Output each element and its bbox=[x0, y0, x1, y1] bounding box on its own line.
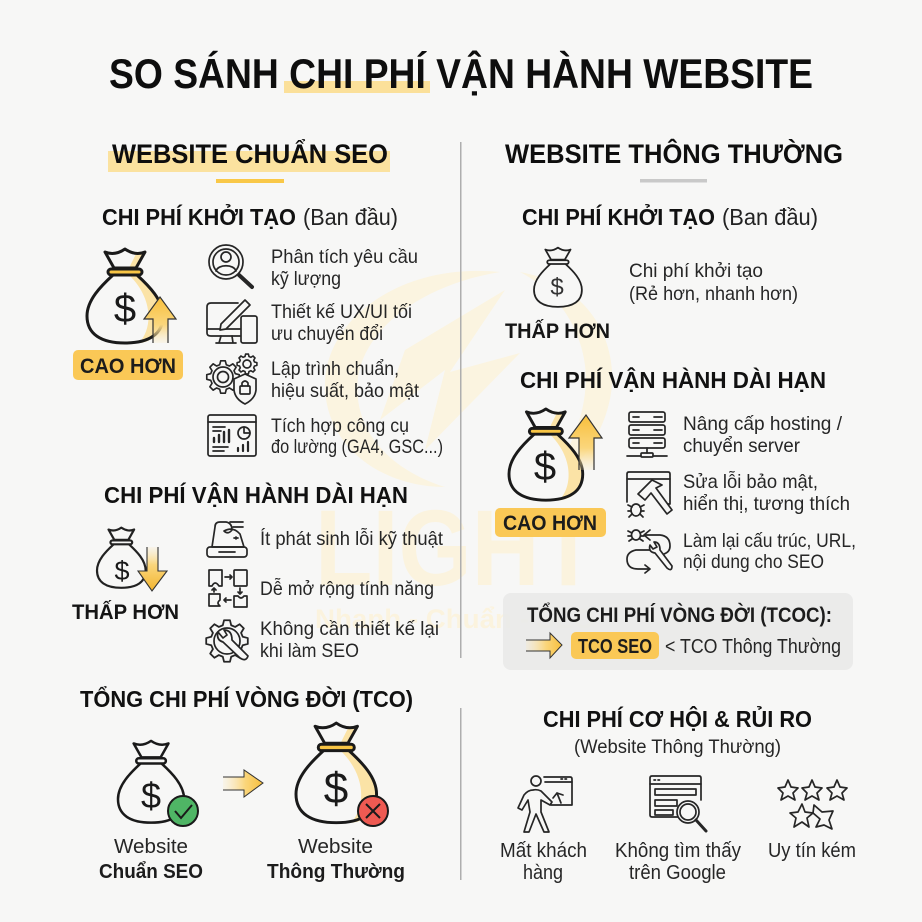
text: lập trình chuẩn bbox=[271, 358, 420, 402]
label: thấp hơn: THẤP HƠN bbox=[505, 320, 610, 343]
text: thiết kế UX/UI: Thiết kế UX/UI tối bbox=[271, 301, 412, 323]
icon: machine bbox=[207, 522, 247, 557]
text: mất khách hàng: Mất khách bbox=[500, 840, 587, 862]
heading: chi phí khởi tạo: (Ban đầu) bbox=[303, 204, 398, 230]
text: phân tích yêu cầu: kỹ lượng bbox=[271, 268, 341, 290]
text: không tìm thấy bbox=[615, 840, 741, 884]
column heading: website chuẩn SEO bbox=[108, 138, 390, 183]
panel: chi phí cơ hội và rủi ro bbox=[500, 704, 856, 884]
text: nâng cấp hosting: chuyển server bbox=[683, 435, 800, 457]
text: lập trình chuẩn: Lập trình chuẩn, bbox=[271, 358, 399, 380]
text: không cần thiết kế lại: khi làm SEO bbox=[260, 640, 359, 662]
watermark: Light logo: Nhanh - Chuẩn - SEO bbox=[315, 604, 595, 634]
icon: money bag with down arrow: $ bbox=[114, 556, 130, 586]
subheading: (Website Thông Thường) bbox=[574, 737, 781, 758]
watermark: Light logo bbox=[315, 271, 612, 634]
text: không tìm thấy: Không tìm thấy bbox=[615, 840, 741, 862]
text: không cần thiết kế lại: Không cần thiết kế lại bbox=[260, 618, 439, 640]
arrow: tco comparison bbox=[223, 770, 263, 797]
icon: monitor and phone bbox=[207, 300, 257, 343]
callout heading: TỔNG CHI PHÍ VÒNG ĐỜI (TCOC): bbox=[527, 603, 832, 627]
text: uy tín kém: Uy tín kém bbox=[768, 840, 856, 862]
icon: bug, wrench and arrows bbox=[627, 530, 672, 573]
icon: servers bbox=[627, 412, 667, 457]
column heading: website chuẩn SEO: WEBSITE CHUẨN SEO bbox=[112, 138, 388, 169]
text: thiết kế UX/UI: ưu chuyển đổi bbox=[271, 323, 383, 345]
label: website thông thường bbox=[267, 836, 405, 883]
text: tích hợp công cụ bbox=[271, 415, 443, 458]
label: website chuẩn SEO: Chuẩn SEO bbox=[99, 860, 203, 883]
heading: chi phí khởi tạo bbox=[522, 202, 818, 230]
column divider bbox=[460, 142, 462, 880]
text: làm lại cấu trúc: nội dung cho SEO bbox=[683, 551, 824, 573]
panel: website thông thường bbox=[495, 138, 856, 884]
icon: search person bbox=[209, 245, 252, 287]
heading: chi phí cơ hội: CHI PHÍ CƠ HỘI & RỦI RO bbox=[543, 704, 812, 732]
badge: tco seo bbox=[571, 632, 659, 659]
icon: bag with check mark bbox=[118, 741, 198, 826]
text: chi phí khởi tạo rẻ hơn: (Rẻ hơn, nhanh hơn) bbox=[629, 283, 798, 305]
icon: bag with cross mark bbox=[296, 723, 388, 826]
badge: cao hơn: CAO HƠN bbox=[503, 512, 597, 535]
text: sửa lỗi bảo mật: Sửa lỗi bảo mật, bbox=[683, 470, 818, 493]
text: thiết kế UX/UI bbox=[271, 301, 412, 345]
text: ít phát sinh lỗi: Ít phát sinh lỗi kỹ thuật bbox=[260, 527, 444, 550]
text: không tìm thấy: trên Google bbox=[629, 862, 726, 884]
badge: cao hơn: CAO HƠN bbox=[80, 355, 176, 378]
text: sửa lỗi bảo mật bbox=[683, 470, 850, 515]
text: làm lại cấu trúc bbox=[683, 530, 856, 573]
heading: chi phí vận hành dài hạn: CHI PHÍ VẬN HÀNH DÀI HẠN bbox=[104, 481, 408, 508]
column heading: website thông thường: WEBSITE THÔNG THƯỜNG bbox=[505, 138, 843, 169]
icon: money bag with up arrow bbox=[87, 249, 176, 343]
text: không cần thiết kế lại bbox=[260, 618, 439, 662]
column heading: website thông thường bbox=[505, 138, 843, 182]
watermark: Light logo: LIGHT bbox=[315, 487, 597, 608]
icon: gear with wrench bbox=[206, 620, 248, 662]
title: SO SÁNH CHI PHÍ VẬN HÀNH WEBSITE bbox=[109, 49, 813, 97]
text: nâng cấp hosting bbox=[683, 413, 843, 457]
heading: chi phí vận hành dài hạn: CHI PHÍ VẬN HÀNH DÀI HẠN bbox=[520, 366, 826, 393]
icon: person leaving window bbox=[518, 776, 572, 832]
list: long-term cost items bbox=[206, 522, 444, 662]
arrow: to tco seo bbox=[526, 633, 562, 658]
heading: chi phí khởi tạo: CHI PHÍ KHỞI TẠO bbox=[522, 202, 715, 230]
label: thấp hơn: THẤP HƠN bbox=[72, 601, 179, 624]
text: phân tích yêu cầu: Phân tích yêu cầu bbox=[271, 246, 418, 268]
label: website chuẩn SEO bbox=[99, 836, 203, 883]
text: tco thông thường: < TCO Thông Thường bbox=[665, 636, 841, 658]
list: long-term cost items bbox=[627, 412, 856, 573]
text: phân tích yêu cầu bbox=[271, 246, 418, 290]
text: tích hợp công cụ: đo lường (GA4, GSC...) bbox=[271, 437, 443, 458]
icon: money bag with down arrow bbox=[97, 528, 167, 591]
badge: tco seo: TCO SEO bbox=[578, 636, 652, 658]
icon: small money bag: $ bbox=[550, 274, 564, 301]
icon: money bag with up arrow bbox=[509, 409, 602, 500]
heading: chi phí khởi tạo bbox=[102, 202, 398, 230]
text: dễ mở rộng tính năng: Dễ mở rộng tính năng bbox=[260, 577, 434, 600]
text: chi phí khởi tạo rẻ hơn: Chi phí khởi tạo bbox=[629, 260, 763, 282]
icon: money bag with up arrow: $ bbox=[114, 287, 136, 331]
icon: money bag with up arrow: $ bbox=[534, 445, 556, 489]
icon: bag with check mark: $ bbox=[141, 775, 161, 816]
icon: gears and shield bbox=[207, 354, 257, 404]
label: website chuẩn SEO: Website bbox=[114, 836, 188, 858]
text: nâng cấp hosting: Nâng cấp hosting / bbox=[683, 413, 843, 435]
text: lập trình chuẩn: hiệu suất, bảo mật bbox=[271, 380, 420, 402]
text: sửa lỗi bảo mật: hiển thị, tương thích bbox=[683, 493, 850, 515]
callout: tổng chi phí vòng đời bbox=[503, 593, 853, 670]
text: chi phí khởi tạo rẻ hơn bbox=[629, 260, 798, 305]
icon: bag with cross mark: $ bbox=[324, 764, 348, 813]
icon: modular blocks bbox=[209, 570, 247, 607]
icon: window, hammer and bug bbox=[627, 472, 672, 517]
text: làm lại cấu trúc: Làm lại cấu trúc, URL, bbox=[683, 530, 856, 552]
heading: tổng chi phí vòng đời: TỔNG CHI PHÍ VÒNG ĐỜI (TCO) bbox=[80, 685, 413, 712]
heading: chi phí khởi tạo: CHI PHÍ KHỞI TẠO bbox=[102, 202, 296, 230]
icon: broken stars bbox=[778, 780, 847, 829]
list: initial cost items bbox=[207, 245, 443, 458]
heading: chi phí khởi tạo: (Ban đầu) bbox=[722, 204, 818, 230]
label: website thông thường: Thông Thường bbox=[267, 860, 405, 883]
icon: page with magnifier bbox=[650, 776, 706, 831]
text: tích hợp công cụ: Tích hợp công cụ bbox=[271, 415, 409, 437]
panel: website chuẩn SEO bbox=[72, 138, 444, 883]
text: mất khách hàng bbox=[500, 840, 587, 884]
text: mất khách hàng: hàng bbox=[523, 862, 563, 884]
icon: analytics dashboard bbox=[208, 415, 256, 456]
label: website thông thường: Website bbox=[298, 836, 373, 858]
icon: small money bag bbox=[534, 248, 582, 307]
